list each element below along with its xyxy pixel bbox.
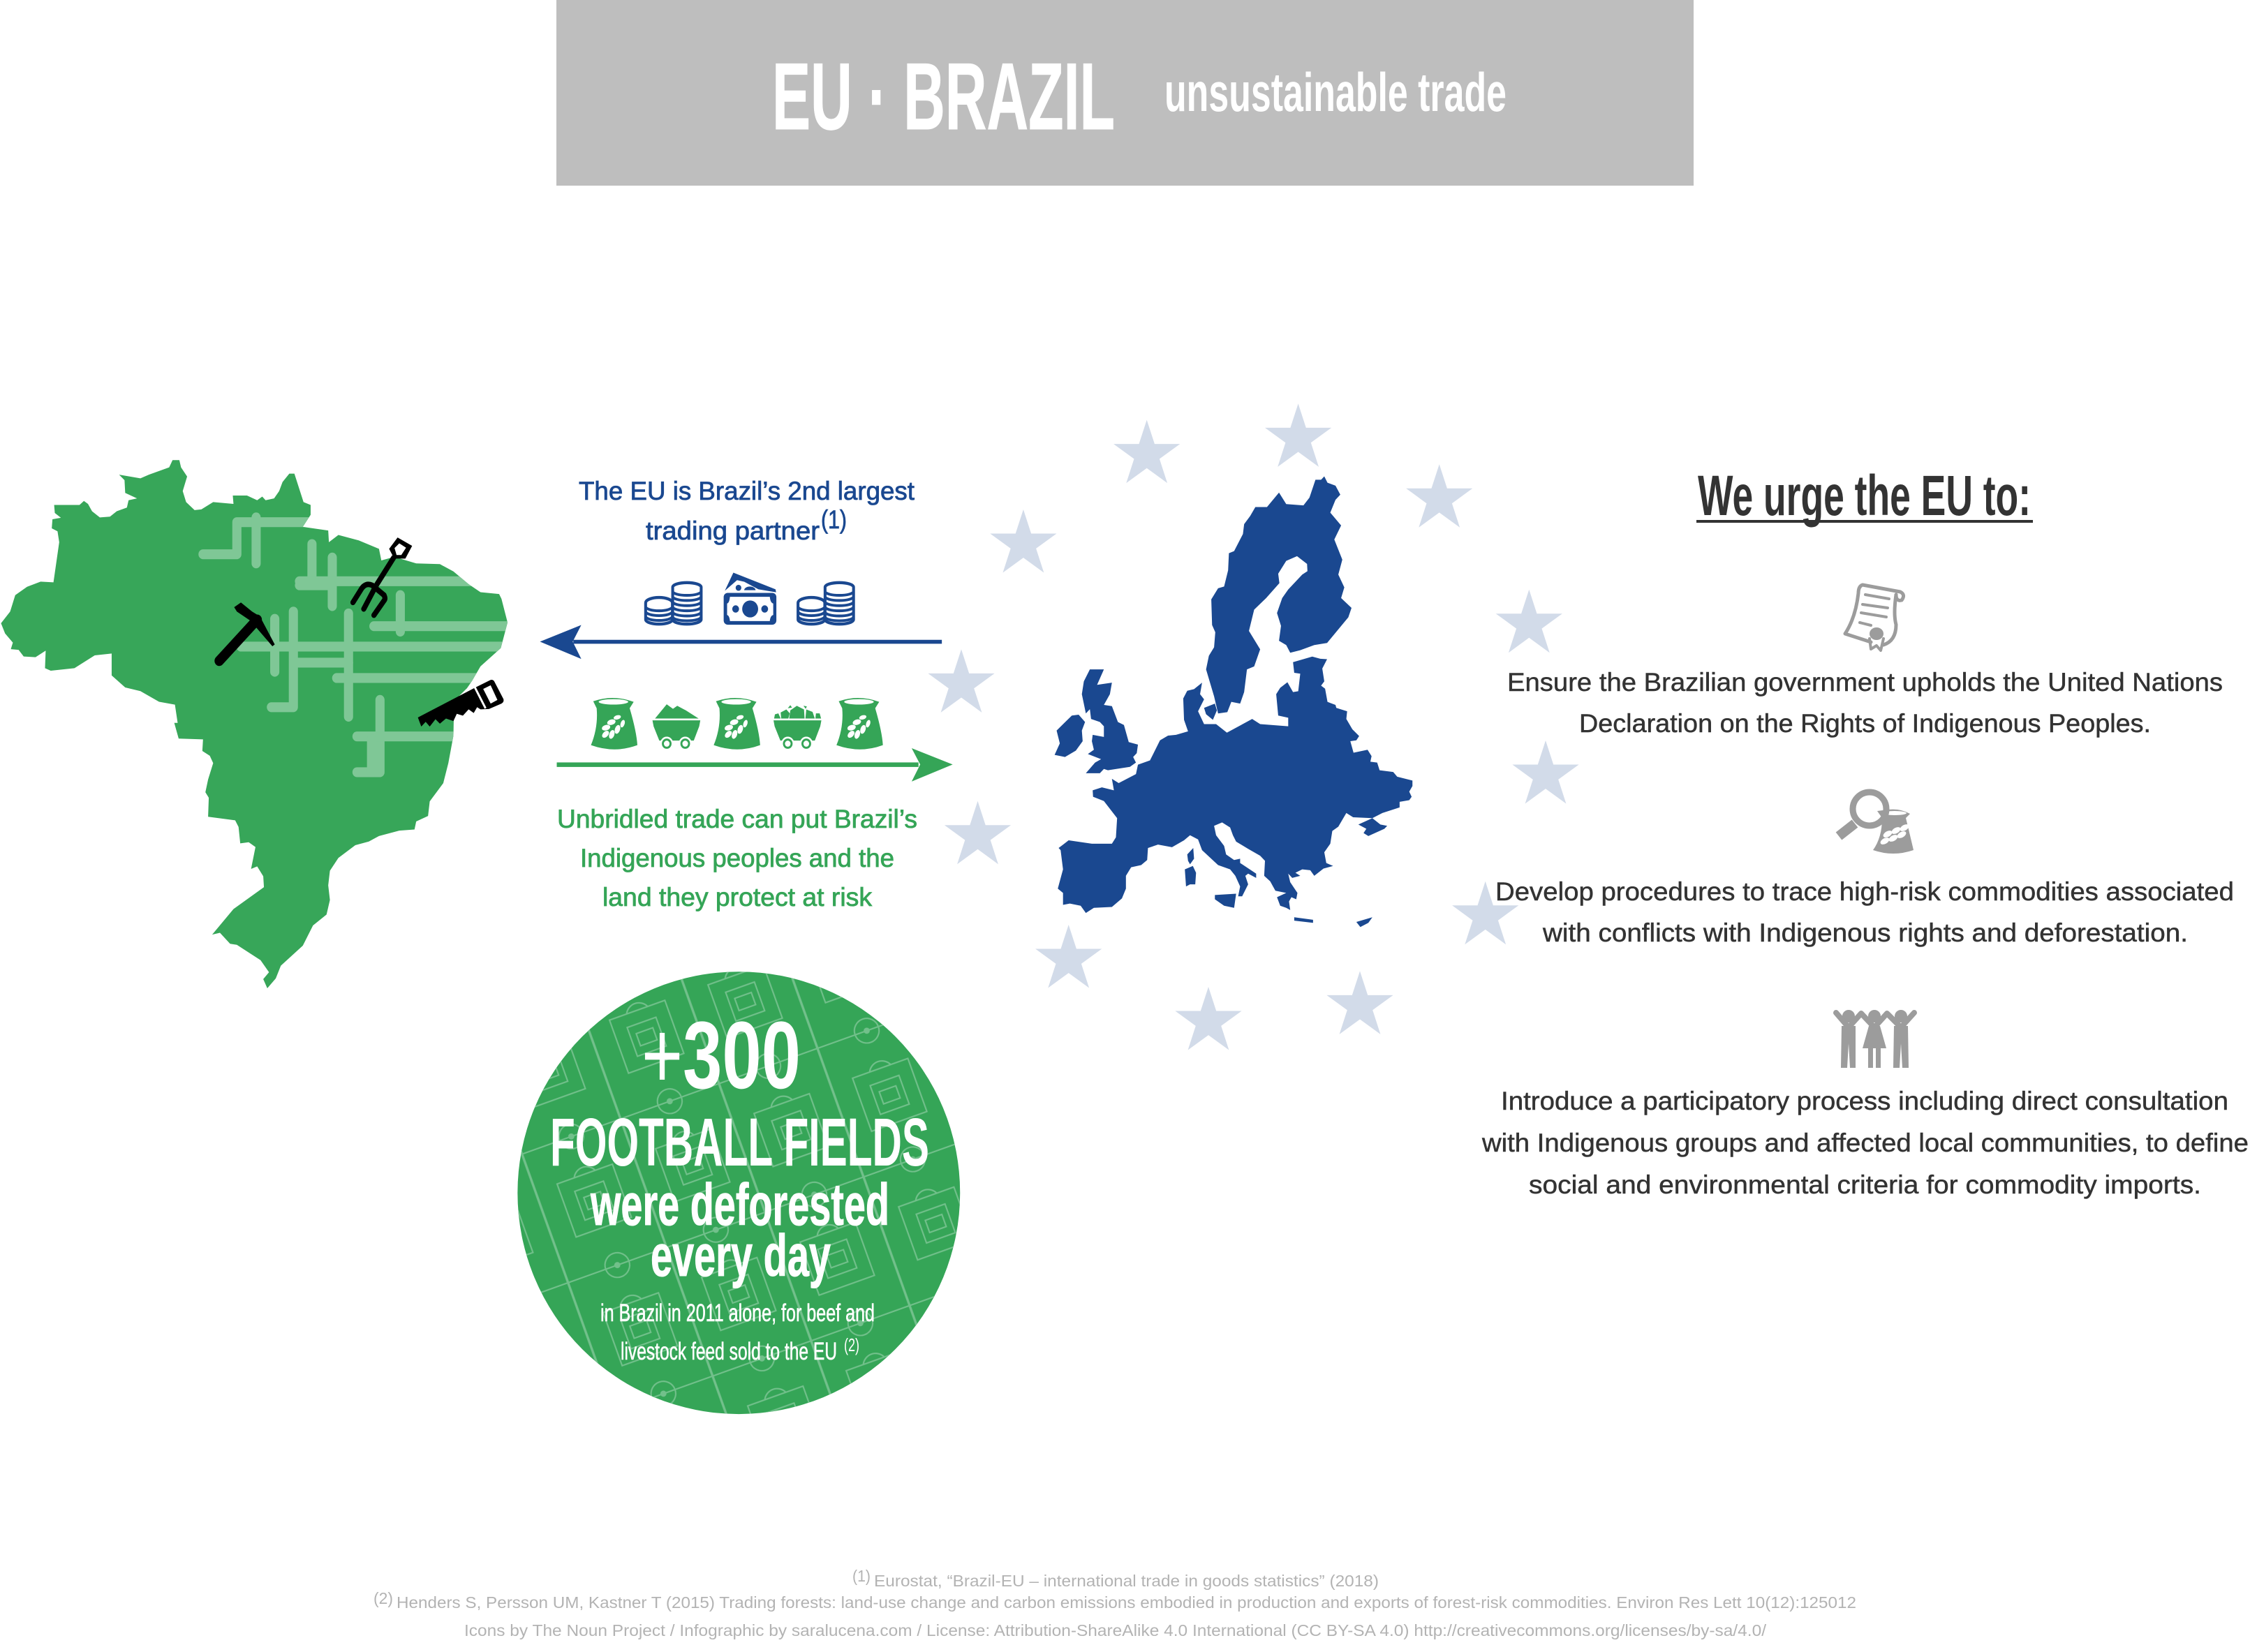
Brazil silhouette xyxy=(1,460,508,988)
circle with pitch pattern xyxy=(517,972,960,1414)
icon: people holding hands xyxy=(1836,1010,1914,1068)
trade flows: icons and arrows xyxy=(540,572,953,782)
title: EU Brazil: EU · BRAZIL xyxy=(772,43,1115,149)
text: recommendation 3: social and environmental criteria for commodity imports. xyxy=(1529,1170,2201,1199)
text: EU trading partner: (1) xyxy=(821,505,847,534)
arrow: EU to Brazil money xyxy=(540,625,942,659)
icon: magnifier over sack xyxy=(1839,792,1914,854)
text: were deforested: were deforested xyxy=(590,1172,889,1237)
footer: sources and credits: (2) xyxy=(373,1589,393,1607)
footer: sources and credits xyxy=(373,1567,1856,1639)
text: context xyxy=(600,1300,875,1365)
statistic: +300: +300 xyxy=(642,1002,801,1109)
map of Brazil with tools xyxy=(1,460,511,988)
text: recommendation 2 xyxy=(1495,877,2234,947)
icon: coins left xyxy=(646,583,701,624)
title banner xyxy=(556,0,1694,186)
text: EU trading partner xyxy=(579,477,915,545)
text: recommendation 2: with conflicts with Indigenous rights and deforestation. xyxy=(1542,918,2188,947)
arrow: Brazil to EU commodities xyxy=(557,748,953,782)
deforestation roads xyxy=(203,517,511,772)
heading: we urge the EU to: We urge the EU to: xyxy=(1698,464,2031,528)
text: EU trading partner: trading partner xyxy=(646,516,820,545)
icon: pickaxe xyxy=(219,602,275,661)
heading: we urge the EU to xyxy=(1696,464,2033,528)
text: every day: every day xyxy=(651,1223,831,1288)
text: context: in Brazil in 2011 alone, for beef and xyxy=(600,1300,875,1327)
panel: football fields circle xyxy=(517,972,960,1414)
text: unbridled trade: Unbridled trade can put Brazil’s xyxy=(557,805,917,833)
text: unbridled trade: land they protect at risk xyxy=(602,883,872,911)
icon: mine cart 2 with rocks xyxy=(774,705,822,750)
text: unbridled trade xyxy=(557,805,917,911)
footer: sources and credits: Icons by The Noun Project / Infographic by saralucena.com / License: Attribution-ShareAlike 4.0 International (CC BY-SA 4.0) http://creativecommons.org/licenses/by-sa/4.0/ xyxy=(464,1621,1767,1639)
icon: scroll certificate xyxy=(1845,585,1904,650)
text: context: (2) xyxy=(844,1334,859,1355)
text: recommendation 3 xyxy=(1481,1087,2249,1199)
map of Europe xyxy=(1055,476,1412,927)
icon: pitchfork xyxy=(353,537,412,616)
text: EU trading partner: The EU is Brazil’s 2nd largest xyxy=(579,477,915,505)
icon: saw xyxy=(418,680,503,727)
icon: banknotes xyxy=(724,572,776,625)
text: recommendation 1: Ensure the Brazilian government upholds the United Nations xyxy=(1507,668,2223,697)
text: context: livestock feed sold to the EU xyxy=(621,1338,837,1365)
icon: coins right xyxy=(798,583,854,624)
text: recommendation 2: Develop procedures to trace high-risk commodities associated xyxy=(1495,877,2234,906)
text: recommendation 1 xyxy=(1507,668,2223,738)
icon: grain sack 1 xyxy=(591,698,637,750)
text: recommendation 1: Declaration on the Rights of Indigenous Peoples. xyxy=(1579,709,2151,738)
footer: sources and credits: (1) xyxy=(852,1567,871,1585)
text: unbridled trade: Indigenous peoples and the xyxy=(580,844,894,872)
footer: sources and credits: Henders S, Persson UM, Kastner T (2015) Trading forests: land-use change and carbon emissions embodied in production and exports of forest-risk commodities. Environ Res Lett 10(12):125012 xyxy=(397,1593,1856,1612)
text: recommendation 3: Introduce a participatory process including direct consultation xyxy=(1501,1087,2228,1115)
EU stars ring xyxy=(928,403,1579,1050)
subtitle: unsustainable trade xyxy=(1164,61,1507,123)
icon: grain sack 3 xyxy=(836,698,883,750)
text: recommendation 3: with Indigenous groups and affected local communities, to define xyxy=(1481,1129,2249,1157)
text: football fields: FOOTBALL FIELDS xyxy=(550,1104,929,1180)
footer: sources and credits: Eurostat, “Brazil-EU – international trade in goods statistics” (2018) xyxy=(874,1572,1379,1590)
icon: grain sack 2 xyxy=(713,698,760,750)
icon: mine cart 1 xyxy=(653,704,700,750)
